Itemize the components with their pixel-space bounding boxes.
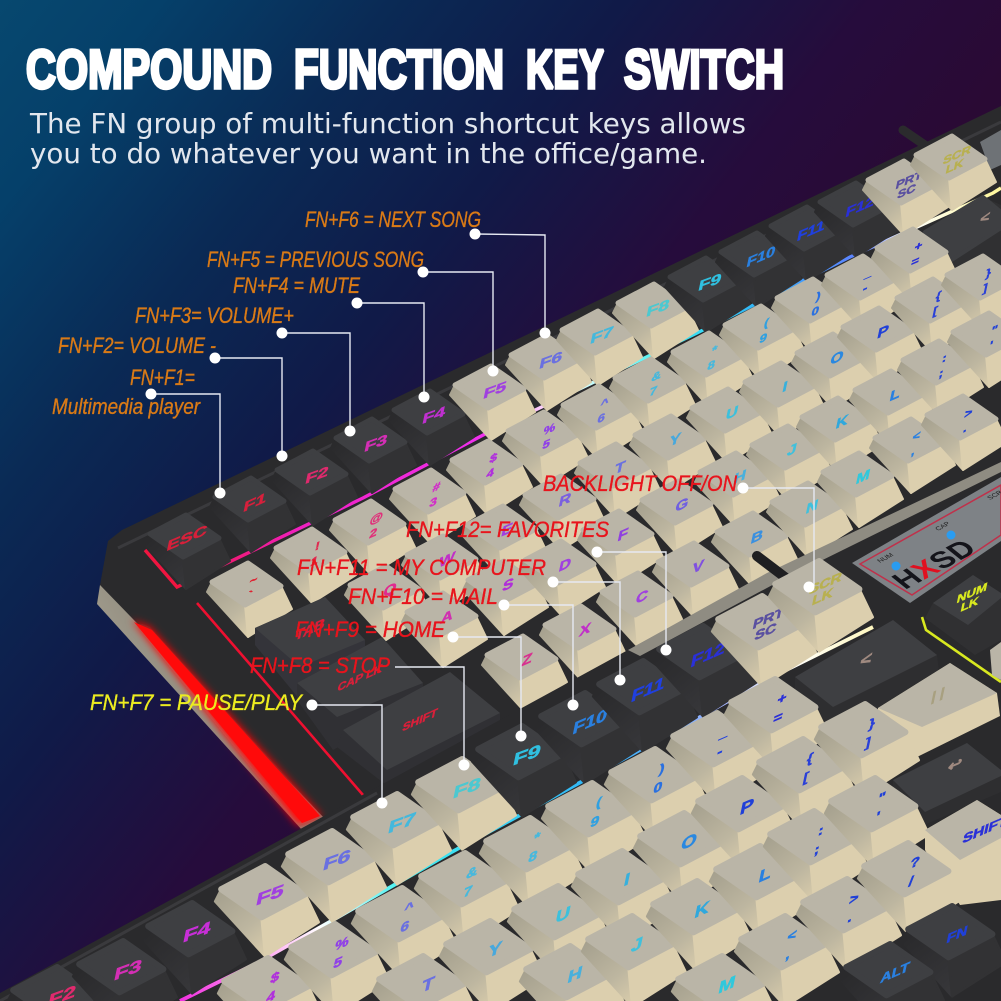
function key row: lower: F9 bbox=[511, 740, 543, 770]
backlight strip: upper bbox=[145, 188, 1001, 587]
number row: upper: % bbox=[542, 419, 557, 437]
red backlight strip: left bbox=[197, 603, 363, 795]
callout: FN+F6 next song bbox=[305, 207, 550, 338]
QWERTY row: lower: ] bbox=[864, 734, 872, 751]
QWERTY row: upper: O bbox=[829, 347, 845, 369]
number row: upper: @ bbox=[369, 508, 384, 527]
keyboard body: lower bbox=[0, 462, 1001, 1001]
callout: FN+F1 multimedia player bbox=[52, 365, 226, 498]
function key row: lower: F7 bbox=[386, 808, 418, 838]
number row: lower: 9 bbox=[589, 812, 601, 831]
red side light bbox=[132, 620, 322, 826]
bottom letter row: lower: > bbox=[848, 889, 860, 908]
title bbox=[26, 38, 784, 100]
bottom letter row: upper: SHIFT bbox=[401, 706, 439, 734]
backspace, num lock and backslash keys: lower: LK bbox=[960, 593, 981, 614]
home row: upper: G bbox=[674, 494, 690, 516]
number row: upper: ~ bbox=[248, 571, 259, 588]
number row: upper: 6 bbox=[596, 409, 606, 426]
number row: upper: ` bbox=[247, 587, 254, 602]
function key row: upper: SCR bbox=[942, 141, 973, 167]
home row: lower: ; bbox=[813, 841, 821, 858]
number row: upper: ) bbox=[815, 288, 822, 303]
function key row: upper: F6 bbox=[538, 348, 564, 372]
lower keyboard bbox=[0, 462, 1001, 1001]
QWERTY row: upper: W bbox=[438, 549, 457, 571]
home row: upper: S bbox=[501, 575, 515, 595]
number row: lower: ^ bbox=[403, 898, 415, 917]
bottom letter row: lower: M bbox=[717, 972, 737, 998]
bottom letter row: upper: Z bbox=[520, 650, 534, 670]
bottom letter row: upper: > bbox=[963, 404, 974, 421]
callout: FN+F12 favorites: FN+F12= FAVORITES bbox=[406, 517, 609, 542]
callout: FN+F4 mute: FN+F4 = MUTE bbox=[233, 273, 360, 298]
QWERTY row: lower bbox=[373, 704, 919, 1001]
callout: FN+F11 my computer bbox=[297, 555, 626, 686]
number row: lower: 8 bbox=[527, 847, 539, 866]
callout: FN+F10 mail bbox=[348, 584, 578, 710]
home row: upper: D bbox=[557, 554, 573, 575]
enter key: lower bbox=[893, 743, 1001, 828]
bottom letter row: upper: V bbox=[691, 557, 705, 577]
bottom letter row: upper: . bbox=[962, 420, 969, 435]
number row: lower: * bbox=[532, 829, 542, 846]
status panel: lower: CAP bbox=[934, 521, 953, 532]
status panel: upper bbox=[980, 130, 1001, 170]
bottom letter row: upper: , bbox=[910, 443, 917, 458]
QWERTY row: upper: E bbox=[500, 520, 514, 540]
QWERTY row: upper: { bbox=[935, 288, 943, 303]
number row: lower: $ bbox=[269, 968, 281, 987]
function key row: upper: F3 bbox=[363, 431, 389, 455]
QWERTY row: upper: } bbox=[985, 265, 993, 280]
backspace, num lock and backslash keys: lower: | | bbox=[930, 685, 946, 705]
function key row: lower: SC bbox=[753, 620, 778, 644]
home row: upper: H bbox=[732, 467, 748, 487]
function key row: upper: F2 bbox=[304, 463, 330, 487]
dark backspace key: upper: < bbox=[979, 208, 991, 228]
number row: upper: 3 bbox=[428, 493, 438, 510]
bottom letter row: lower bbox=[672, 843, 962, 1001]
home row: lower: K bbox=[693, 897, 711, 923]
number row: upper: 9 bbox=[758, 329, 768, 346]
function key row: lower: F6 bbox=[321, 845, 353, 875]
bottom letter row: upper: N bbox=[804, 497, 820, 517]
home row: lower: ' bbox=[875, 808, 881, 825]
number row: lower: % bbox=[334, 933, 351, 954]
number row: upper: 4 bbox=[485, 464, 496, 481]
home row: lower: " bbox=[877, 789, 887, 806]
callout: FN+F9 home: FN+F9 = HOME bbox=[295, 617, 445, 642]
QWERTY row: lower: P bbox=[738, 795, 756, 819]
number row: upper: ( bbox=[763, 315, 771, 330]
subtitle bbox=[29, 107, 746, 170]
title: KEY bbox=[526, 38, 604, 100]
bottom letter row: upper: M bbox=[854, 466, 872, 488]
function key row: upper: F9 bbox=[697, 270, 723, 294]
function key row: lower: F4 bbox=[181, 917, 213, 947]
number row: upper: 7 bbox=[648, 382, 658, 399]
QWERTY row: lower: O bbox=[679, 829, 699, 855]
callout: FN+F5 previous song bbox=[207, 247, 498, 376]
bottom letter row: upper bbox=[337, 396, 1001, 788]
callout: FN+F9 home bbox=[295, 617, 526, 742]
dark backspace key: upper bbox=[925, 197, 1001, 290]
function key row: lower bbox=[7, 561, 873, 1001]
function key row: upper: ESC bbox=[165, 522, 209, 554]
number row: upper: - bbox=[862, 280, 869, 295]
function key row: upper bbox=[145, 136, 996, 589]
number row: upper: 1 bbox=[309, 552, 319, 569]
bottom letter row: upper: C bbox=[634, 586, 650, 607]
function key row: lower: F8 bbox=[451, 773, 483, 803]
home row: upper: : bbox=[941, 350, 948, 365]
home row: upper: F bbox=[616, 525, 630, 545]
QWERTY row: upper: R bbox=[557, 489, 573, 510]
function key row: lower: F12 bbox=[689, 638, 727, 672]
enter key: lower: ↩ bbox=[946, 754, 964, 776]
callout: FN+F4 mute bbox=[233, 273, 430, 402]
cable: upper bbox=[903, 130, 932, 150]
function key row: lower: LK bbox=[811, 585, 834, 609]
number row: lower: + bbox=[776, 689, 788, 708]
QWERTY row: upper: Q bbox=[382, 579, 398, 601]
bottom letter row: upper: < bbox=[911, 427, 922, 444]
number row: lower: - bbox=[716, 743, 724, 760]
QWERTY row: upper bbox=[255, 256, 1001, 700]
number row: upper: + bbox=[913, 237, 924, 254]
callout: FN+F8 stop bbox=[250, 653, 470, 770]
number row: upper: _ bbox=[863, 264, 874, 281]
number row: upper: ^ bbox=[599, 394, 610, 411]
ALT and FN keys: lower: ALT bbox=[879, 959, 912, 987]
function key row: upper: F10 bbox=[745, 243, 777, 271]
number row: lower: 7 bbox=[462, 882, 474, 901]
function key row: upper: F8 bbox=[645, 296, 671, 320]
callout: backlight off/on bbox=[543, 471, 814, 592]
backspace, num lock and backslash keys: lower: NUM bbox=[956, 579, 989, 605]
callout: FN+F11 my computer: FN+F11 = MY COMPUTER bbox=[297, 555, 546, 580]
shift key: lower bbox=[925, 800, 1001, 905]
number row: upper: # bbox=[432, 478, 442, 495]
home row: lower: J bbox=[629, 933, 645, 957]
home row: lower: : bbox=[817, 822, 825, 839]
function key row: upper: SC bbox=[896, 180, 918, 201]
callout: FN+F2 volume down bbox=[58, 333, 288, 462]
callout: FN+F8 stop: FN+F8 = STOP bbox=[250, 653, 390, 678]
bottom letter row: lower: . bbox=[846, 909, 854, 926]
bottom letter row: lower: < bbox=[786, 926, 798, 945]
home row: lower: L bbox=[757, 863, 773, 887]
QWERTY row: upper: ] bbox=[982, 280, 989, 295]
callout: FN+F10 mail: FN+F10 = MAIL bbox=[348, 584, 498, 609]
number row: lower: 0 bbox=[652, 778, 664, 797]
function key row: lower: F5 bbox=[254, 880, 286, 910]
callout: FN+F6 next song: FN+F6 = NEXT SONG bbox=[305, 207, 481, 232]
function key row: upper: PRT bbox=[895, 167, 924, 192]
QWERTY row: upper: I bbox=[781, 378, 789, 396]
home row: upper: K bbox=[834, 411, 850, 432]
number row: lower: 5 bbox=[332, 953, 344, 972]
home row: upper: J bbox=[786, 440, 798, 460]
ALT and FN keys: lower bbox=[840, 906, 1001, 1001]
bottom letter row: lower: , bbox=[784, 946, 792, 963]
number row: lower: 6 bbox=[399, 917, 411, 936]
number row: lower: & bbox=[465, 863, 479, 882]
home row: upper: A bbox=[439, 606, 455, 627]
number row: lower bbox=[218, 679, 829, 1001]
home row: upper: " bbox=[990, 322, 999, 337]
callout: FN+F2 volume down: FN+F2= VOLUME - bbox=[58, 333, 216, 358]
silver edge strip bbox=[97, 585, 326, 830]
number row: upper: ! bbox=[314, 538, 321, 553]
cable: lower bbox=[757, 556, 786, 578]
callout: FN+F7 pause/play bbox=[90, 690, 388, 808]
home row: upper: L bbox=[888, 385, 902, 405]
function key row: lower: SCR bbox=[808, 569, 843, 598]
number row: upper: * bbox=[711, 341, 719, 357]
QWERTY row: upper: Y bbox=[668, 430, 682, 450]
QWERTY row: upper: T bbox=[613, 458, 627, 478]
bottom letter row: lower: / bbox=[907, 873, 915, 890]
upper keyboard bbox=[97, 106, 1001, 835]
backspace, num lock and backslash keys: lower: < bbox=[858, 648, 874, 672]
status panel: lower bbox=[852, 477, 1001, 603]
function key row: lower: F11 bbox=[629, 673, 667, 707]
status panel: lower: HXSD bbox=[885, 535, 984, 594]
home row: lower: H bbox=[566, 962, 584, 988]
callout: FN+F1 multimedia player: FN+F1= bbox=[130, 365, 195, 390]
callout: FN+F7 pause/play: FN+F7 = PAUSE/PLAY bbox=[90, 690, 303, 715]
function key row: upper: F11 bbox=[796, 217, 826, 245]
number row: upper: $ bbox=[489, 449, 499, 466]
number row: upper: 0 bbox=[810, 302, 820, 319]
function key row: lower: F3 bbox=[112, 955, 144, 985]
callout: FN+F1 multimedia player: Multimedia player bbox=[52, 394, 201, 419]
function key row: upper: F1 bbox=[242, 489, 268, 515]
status panel: lower: NUM bbox=[876, 552, 896, 564]
callout: backlight off/on: BACKLIGHT OFF/ON bbox=[543, 471, 737, 496]
QWERTY row: lower: [ bbox=[802, 769, 810, 786]
function key row: upper: F5 bbox=[482, 378, 508, 402]
function key row: upper: LK bbox=[945, 155, 966, 176]
QWERTY row: upper: TAB bbox=[294, 616, 326, 644]
home row: upper bbox=[297, 313, 1001, 750]
number row: upper: 8 bbox=[706, 356, 716, 373]
number row: upper bbox=[207, 229, 957, 637]
subtitle: you to do whatever you want in the office/game. bbox=[30, 137, 707, 170]
QWERTY row: lower: { bbox=[805, 750, 815, 767]
QWERTY row: lower: U bbox=[554, 902, 572, 928]
QWERTY row: upper: P bbox=[876, 322, 890, 342]
function key row: lower: PRT bbox=[751, 604, 786, 632]
callout: FN+F3 volume up bbox=[135, 303, 356, 436]
subtitle: The FN group of multi-function shortcut keys allows bbox=[29, 107, 746, 140]
function key row: upper: F7 bbox=[589, 323, 615, 347]
keyboard body: upper bbox=[97, 106, 1001, 835]
QWERTY row: upper: [ bbox=[932, 303, 940, 318]
number row: lower: _ bbox=[717, 723, 730, 742]
function key row: upper: F12 bbox=[844, 193, 876, 221]
bottom letter row: upper: B bbox=[749, 526, 765, 547]
QWERTY row: upper: U bbox=[724, 403, 740, 423]
home row: upper: CAP LK bbox=[336, 662, 384, 694]
number row: lower: = bbox=[772, 708, 784, 727]
number row: lower: ( bbox=[595, 794, 604, 811]
bottom letter row: lower: ? bbox=[909, 853, 921, 872]
number row: lower: ) bbox=[658, 760, 666, 777]
callout: FN+F12 favorites bbox=[406, 517, 672, 656]
number row: upper: & bbox=[650, 367, 663, 384]
QWERTY row: lower: } bbox=[867, 715, 877, 732]
number row: upper: 5 bbox=[541, 435, 551, 452]
bottom letter row: upper: X bbox=[578, 620, 592, 640]
QWERTY row: lower: Y bbox=[486, 938, 504, 962]
title: FUNCTION bbox=[294, 38, 504, 100]
ALT and FN keys: lower: FN bbox=[945, 923, 969, 947]
home row: upper: ' bbox=[988, 337, 994, 352]
callout: FN+F3 volume up: FN+F3= VOLUME+ bbox=[135, 303, 294, 328]
QWERTY row: lower: T bbox=[420, 973, 436, 997]
backspace, num lock and backslash keys: lower bbox=[795, 575, 1001, 757]
QWERTY row: lower: I bbox=[622, 869, 632, 891]
number row: upper: = bbox=[910, 252, 921, 269]
function key row: upper: F4 bbox=[421, 403, 447, 427]
title: COMPOUND bbox=[26, 38, 272, 100]
home row: upper: ; bbox=[938, 365, 945, 380]
number row: upper: 2 bbox=[368, 524, 378, 541]
callout: FN+F5 previous song: FN+F5 = PREVIOUS SONG bbox=[207, 247, 424, 272]
backlight strips: lower bbox=[180, 617, 1001, 1001]
title: SWITCH bbox=[624, 38, 784, 100]
home row: lower bbox=[520, 778, 929, 1001]
function key row: lower: F10 bbox=[571, 705, 609, 739]
